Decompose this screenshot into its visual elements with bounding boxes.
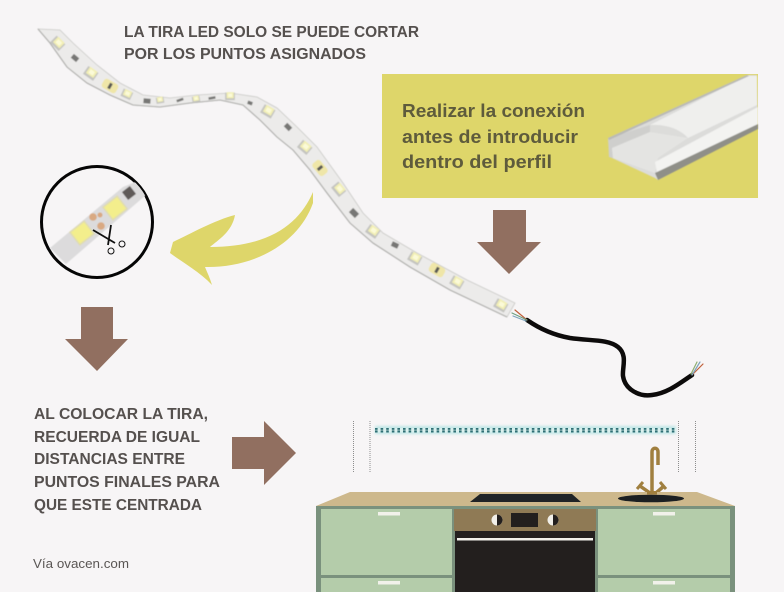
cable — [512, 310, 703, 395]
icon: aluminium profile — [608, 75, 758, 180]
panel text — [402, 101, 585, 172]
sink — [618, 495, 684, 502]
panel text: antes de introducir — [402, 127, 578, 147]
LED strip with cable — [38, 29, 703, 395]
faucet base — [647, 491, 657, 494]
heading: cut points — [124, 24, 419, 63]
text: distance advice: AL COLOCAR LA TIRA, — [34, 406, 208, 423]
countertop — [316, 492, 735, 506]
text: distance advice — [34, 406, 220, 514]
arrow: right — [232, 421, 296, 485]
heading: cut points: POR LOS PUNTOS ASIGNADOS — [124, 46, 366, 63]
door handles — [378, 512, 675, 584]
cut detail circle — [42, 166, 152, 278]
panel text: Realizar la conexión — [402, 101, 585, 121]
cabinet doors — [321, 509, 730, 592]
cabinet frame — [316, 506, 735, 592]
arrow: panel down — [477, 210, 541, 274]
icon: scissors — [93, 225, 125, 254]
faucet — [637, 448, 666, 493]
text: distance advice: PUNTOS FINALES PARA — [34, 474, 220, 491]
panel: connection note — [382, 74, 758, 198]
strip LEDs — [50, 35, 509, 313]
dotted guide lines — [354, 421, 696, 473]
oven — [454, 509, 596, 592]
panel text: dentro del perfil — [402, 152, 552, 172]
cooktop — [470, 494, 581, 502]
text: distance advice: DISTANCIAS ENTRE — [34, 451, 185, 468]
LED strip lit — [375, 426, 676, 434]
text: distance advice: QUE ESTE CENTRADA — [34, 497, 202, 514]
kitchen illustration — [316, 421, 735, 592]
strip body — [38, 29, 515, 317]
source credit: Vía ovacen.com — [33, 557, 129, 571]
strip close-up — [50, 180, 146, 264]
arrow: curved yellow — [170, 192, 313, 285]
heading: cut points: LA TIRA LED SOLO SE PUEDE CORTAR — [124, 24, 419, 41]
arrow: left down — [65, 307, 128, 371]
text: distance advice: RECUERDA DE IGUAL — [34, 429, 200, 446]
